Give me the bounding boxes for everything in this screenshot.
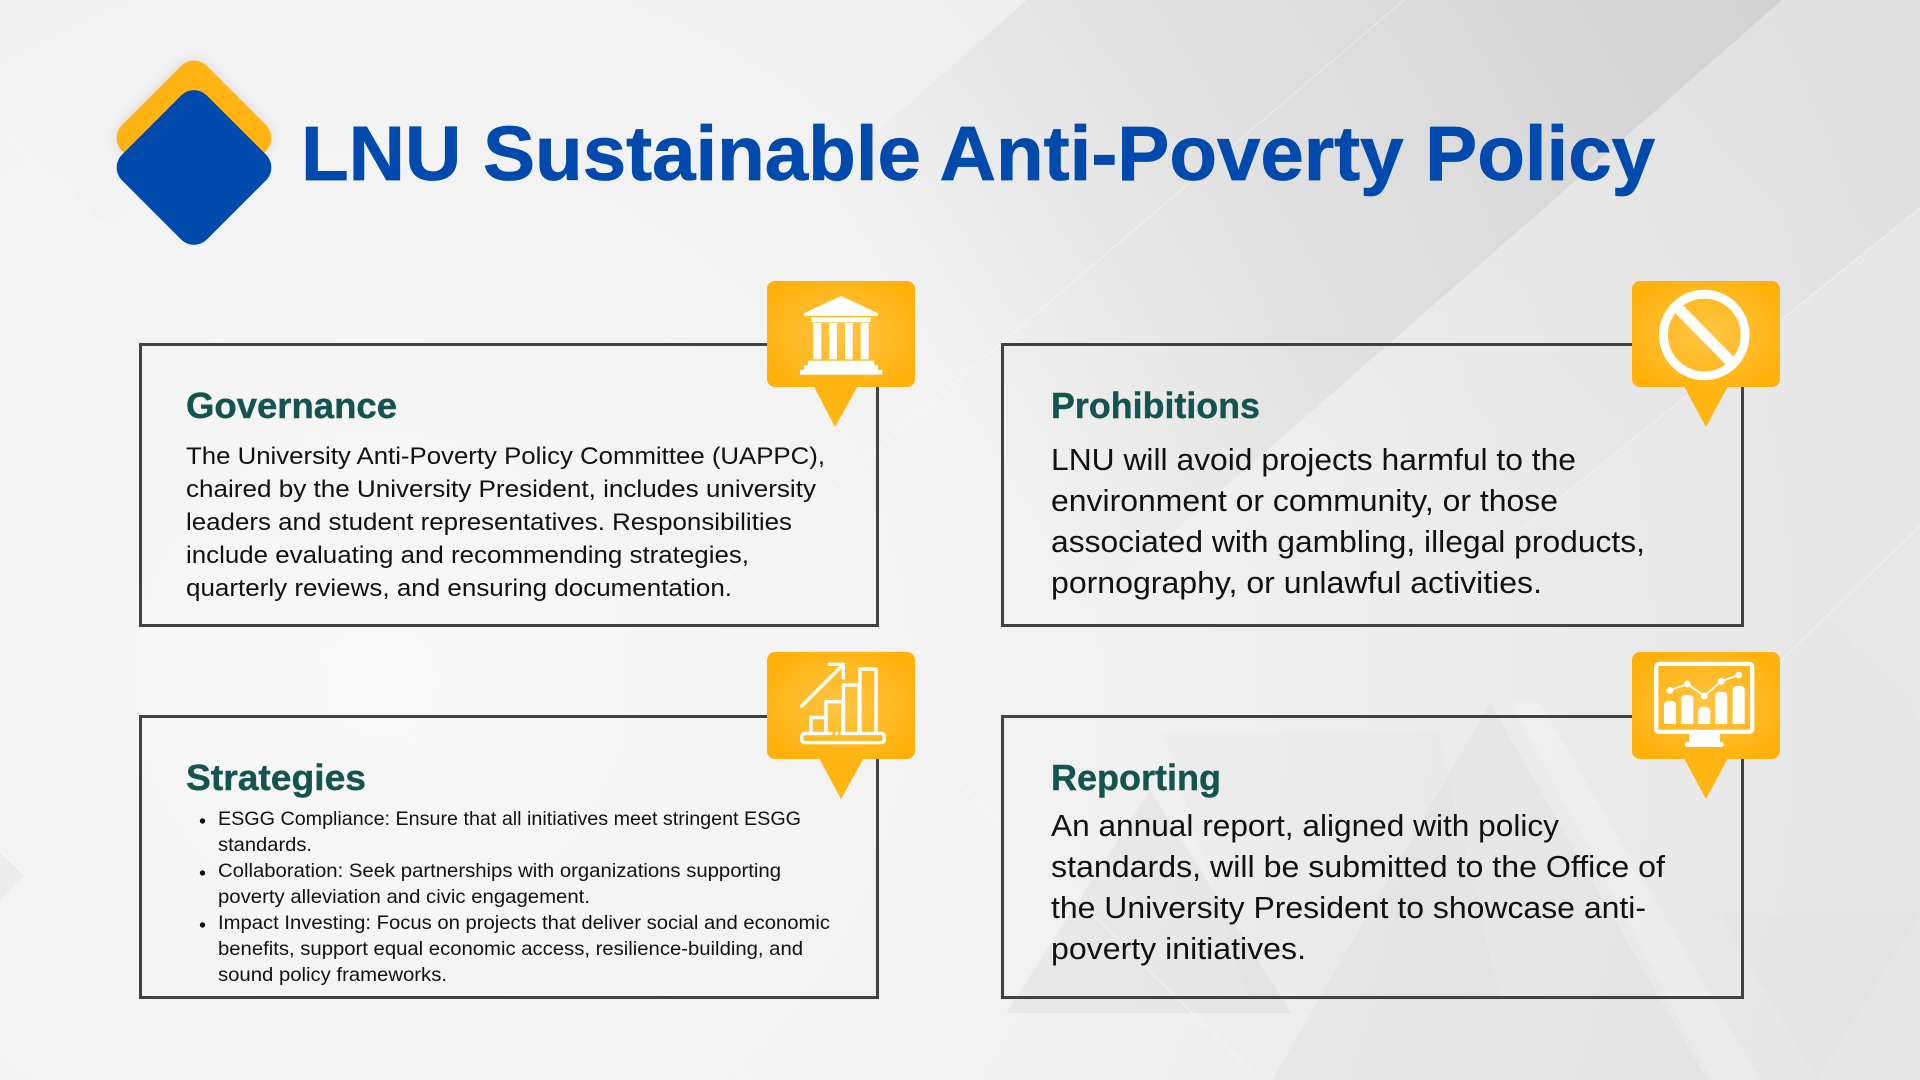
- text block: governance body: include evaluating and recommending strategies,: [186, 542, 749, 569]
- text block: governance body: [186, 443, 825, 602]
- bullet list: strategies: Impact Investing: Focus on projects that deliver social and economic: [218, 912, 830, 934]
- heading: governance: Governance: [186, 385, 397, 426]
- text block: reporting body: [1051, 809, 1666, 966]
- panel: governance: [140, 281, 915, 626]
- text block: prohibitions body: pornography, or unlawful activities.: [1051, 566, 1542, 600]
- text block: prohibitions body: environment or community, or those: [1051, 484, 1558, 518]
- logo: stacked diamonds: [109, 53, 279, 252]
- heading: reporting: Reporting: [1051, 757, 1221, 798]
- text block: prohibitions body: LNU will avoid projects harmful to the: [1051, 443, 1576, 477]
- panel: strategies: [140, 652, 915, 998]
- text block: governance body: chaired by the University President, includes university: [186, 476, 817, 503]
- heading: prohibitions: Prohibitions: [1051, 385, 1260, 426]
- icon badge: monitor with chart: [1632, 652, 1780, 799]
- bullet list: strategies: sound policy frameworks.: [218, 964, 447, 986]
- text block: prohibitions body: associated with gambling, illegal products,: [1051, 525, 1645, 559]
- panel: reporting: [1002, 652, 1780, 998]
- bullet list: strategies: standards.: [218, 834, 312, 856]
- text block: governance body: quarterly reviews, and ensuring documentation.: [186, 575, 732, 602]
- panel: prohibitions: [1002, 281, 1780, 626]
- text block: governance body: leaders and student representatives. Responsibilities: [186, 509, 792, 536]
- icon badge: bank building: [767, 281, 915, 427]
- text block: governance body: The University Anti-Poverty Policy Committee (UAPPC),: [186, 443, 825, 470]
- text block: reporting body: poverty initiatives.: [1051, 932, 1306, 966]
- bullet list: strategies: poverty alleviation and civic engagement.: [218, 886, 590, 908]
- text block: reporting body: An annual report, aligned with policy: [1051, 809, 1560, 843]
- bullet list: strategies: Collaboration: Seek partnerships with organizations supporting: [218, 860, 781, 882]
- icon badge: prohibited sign: [1632, 281, 1780, 427]
- icon badge: growth bar chart: [767, 652, 915, 799]
- text block: reporting body: standards, will be submitted to the Office of: [1051, 850, 1666, 884]
- title: LNU Sustainable Anti-Poverty Policy: [301, 111, 1655, 197]
- bullet list: strategies: [200, 808, 830, 986]
- bullet list: strategies: benefits, support equal economic access, resilience-building, and: [218, 938, 803, 960]
- text block: reporting body: the University President to showcase anti-: [1051, 891, 1646, 925]
- text block: prohibitions body: [1051, 443, 1645, 600]
- bullet list: strategies: ESGG Compliance: Ensure that all initiatives meet stringent ESGG: [218, 808, 801, 830]
- heading: strategies: Strategies: [186, 757, 366, 798]
